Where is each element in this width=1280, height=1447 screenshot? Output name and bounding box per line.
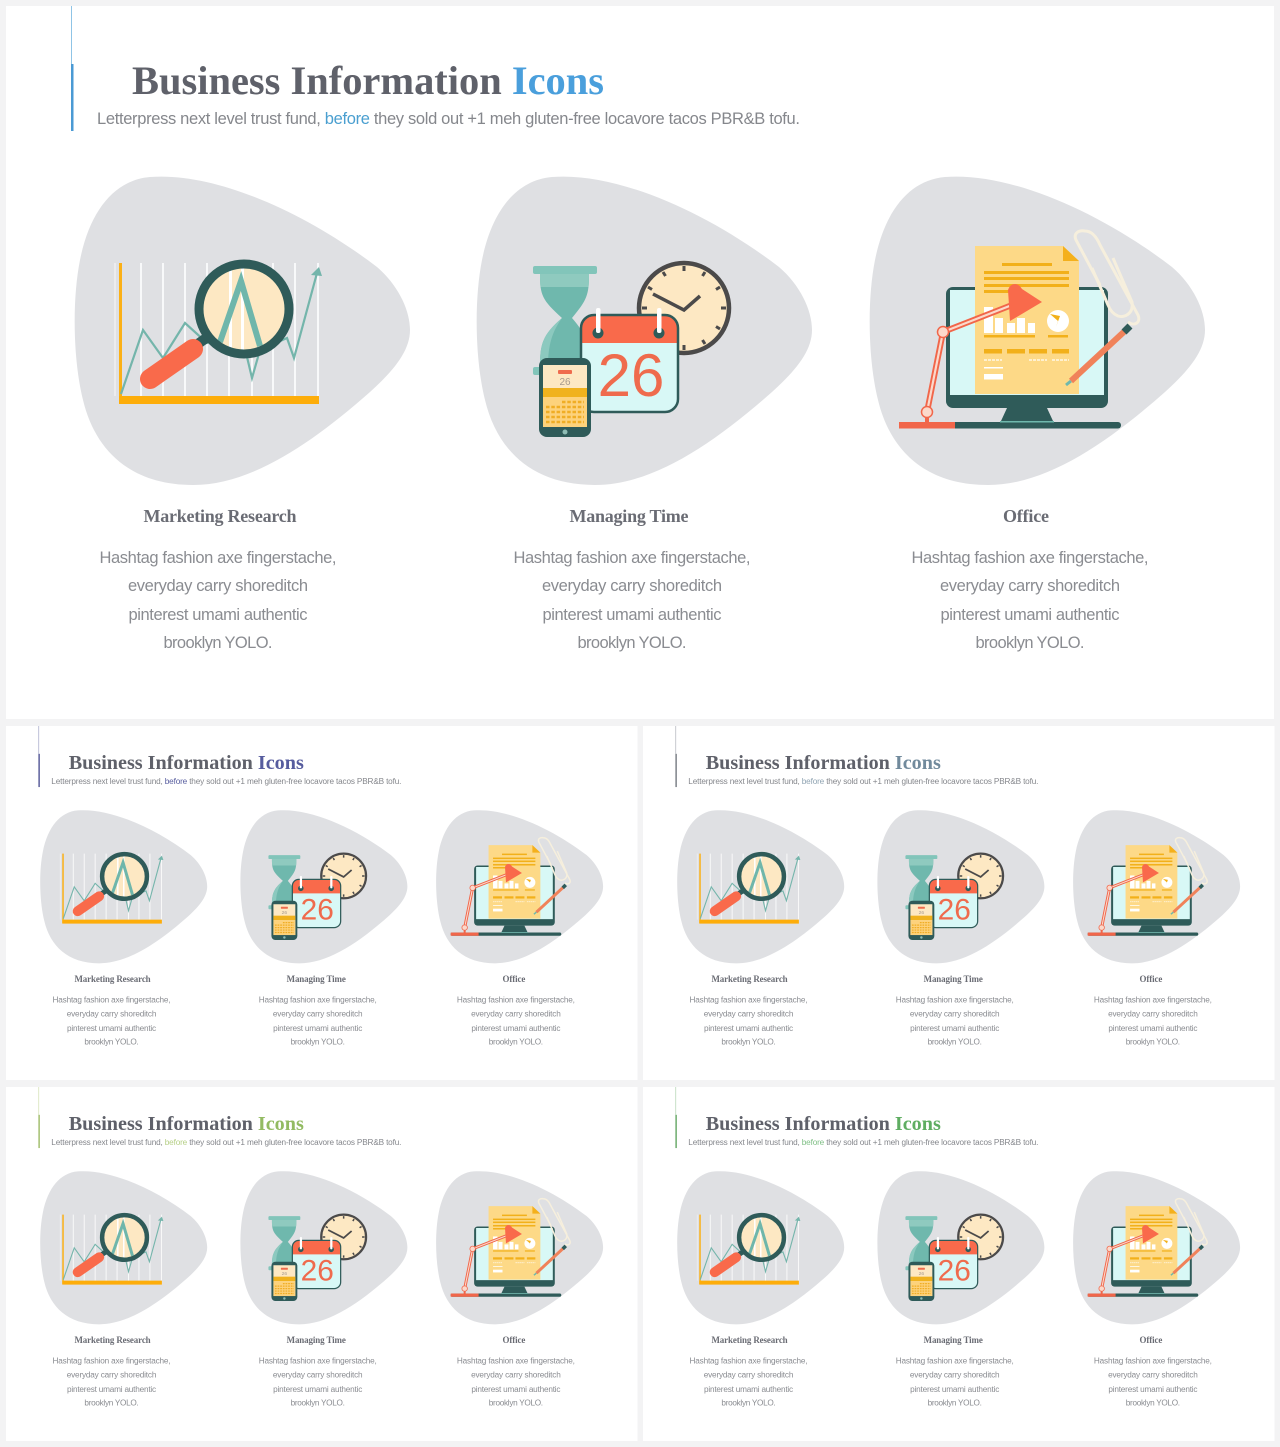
column: Managing Time: [877, 1171, 1044, 1408]
text block: Marketing Research: Hashtag fashion axe fingerstache,: [690, 996, 808, 1005]
icon: hourglass, clock, calendar and phone: [877, 1171, 1044, 1324]
slide background: [643, 726, 1274, 1080]
icon: hourglass, clock, calendar and phone: 26: [301, 894, 334, 927]
heading: Managing Time: Managing Time: [924, 1335, 983, 1345]
title: Business Information Icons: [706, 1113, 941, 1135]
text block: Marketing Research: Hashtag fashion axe fingerstache,: [100, 549, 336, 567]
column: Office: [436, 1171, 603, 1408]
text block: Marketing Research: brooklyn YOLO.: [721, 1399, 776, 1408]
text block: Managing Time: Hashtag fashion axe fingerstache,: [896, 1357, 1014, 1366]
icon: hourglass, clock, calendar and phone: 26: [938, 1255, 971, 1288]
icon: monitor, document and lamp: [1073, 810, 1240, 963]
heading: Managing Time: Managing Time: [287, 1335, 346, 1345]
accent line: [675, 1087, 677, 1148]
text block: Managing Time: Hashtag fashion axe fingerstache,: [259, 996, 377, 1005]
text block: Managing Time: brooklyn YOLO.: [578, 634, 686, 652]
text block: Marketing Research: brooklyn YOLO.: [84, 1038, 139, 1047]
panel: light green slide: [6, 1087, 637, 1441]
text block: Marketing Research: brooklyn YOLO.: [84, 1399, 139, 1408]
text block: Managing Time: everyday carry shoreditch: [273, 1009, 363, 1018]
heading: Office: Office: [503, 974, 525, 984]
text block: Office: [912, 549, 1148, 652]
text block: Office: brooklyn YOLO.: [489, 1399, 543, 1408]
text block: Office: Hashtag fashion axe fingerstache,: [1094, 1357, 1212, 1366]
text block: Marketing Research: [690, 1357, 808, 1408]
icon: magnifier over chart: [677, 1171, 844, 1324]
text block: Office: pinterest umami authentic: [471, 1024, 561, 1033]
text block: Marketing Research: pinterest umami authentic: [67, 1024, 156, 1033]
icon: magnifier over chart: [75, 177, 410, 485]
column: Office: [1073, 1171, 1240, 1408]
heading: Managing Time: Managing Time: [287, 974, 346, 984]
column: Office: [870, 177, 1205, 652]
text block: Office: [457, 1357, 575, 1408]
panel: main blue slide: [6, 6, 1274, 719]
text block: Marketing Research: everyday carry shoreditch: [128, 577, 308, 595]
icon: hourglass, clock, calendar and phone: 26: [282, 910, 287, 916]
heading: Marketing Research: Marketing Research: [74, 1335, 151, 1345]
text block: Managing Time: pinterest umami authentic: [273, 1024, 362, 1033]
text block: Marketing Research: Hashtag fashion axe fingerstache,: [53, 996, 171, 1005]
text block: Office: [457, 996, 575, 1047]
panel: slate slide: [643, 726, 1274, 1080]
text block: Managing Time: [896, 996, 1014, 1047]
slide background: [6, 1087, 637, 1441]
text block: Office: brooklyn YOLO.: [1126, 1399, 1180, 1408]
icon: hourglass, clock, calendar and phone: 26: [919, 910, 924, 916]
text block: Office: pinterest umami authentic: [471, 1385, 561, 1394]
column: Marketing Research: [40, 1171, 207, 1408]
text block: Marketing Research: pinterest umami authentic: [128, 606, 308, 624]
column: Managing Time: [877, 810, 1044, 1047]
text block: Managing Time: pinterest umami authentic: [910, 1024, 999, 1033]
text block: Office: everyday carry shoreditch: [471, 1370, 561, 1379]
text block: Office: pinterest umami authentic: [1108, 1385, 1198, 1394]
icon: magnifier over chart: [677, 810, 844, 963]
column: Marketing Research: [677, 1171, 844, 1408]
text block: Managing Time: everyday carry shoreditch: [910, 1009, 1000, 1018]
accent line: [38, 1087, 40, 1148]
accent line: [38, 726, 40, 787]
heading: Managing Time: Managing Time: [570, 506, 688, 526]
text block: Office: Hashtag fashion axe fingerstache,: [457, 1357, 575, 1366]
icon: magnifier over chart: [40, 810, 207, 963]
text block: Managing Time: pinterest umami authentic: [910, 1385, 999, 1394]
text block: Marketing Research: pinterest umami authentic: [67, 1385, 156, 1394]
text block: Managing Time: everyday carry shoreditch: [273, 1370, 363, 1379]
text block: Managing Time: [259, 996, 377, 1047]
text block: Office: brooklyn YOLO.: [976, 634, 1084, 652]
icon: hourglass, clock, calendar and phone: 26: [919, 1271, 924, 1277]
text block: Managing Time: [896, 1357, 1014, 1408]
column: Managing Time: [240, 1171, 407, 1408]
title: Business Information Icons: [706, 752, 941, 774]
column: Marketing Research: [40, 810, 207, 1047]
column: Office: [1073, 810, 1240, 1047]
text block: Office: Hashtag fashion axe fingerstache,: [1094, 996, 1212, 1005]
text block: Marketing Research: pinterest umami authentic: [704, 1385, 793, 1394]
text block: Marketing Research: everyday carry shoreditch: [67, 1009, 157, 1018]
icon: monitor, document and lamp: [436, 810, 603, 963]
text block: Marketing Research: everyday carry shoreditch: [704, 1009, 794, 1018]
heading: Marketing Research: Marketing Research: [711, 974, 788, 984]
text block: Marketing Research: brooklyn YOLO.: [721, 1038, 776, 1047]
heading: Office: Office: [1003, 506, 1049, 526]
text block: Managing Time: Hashtag fashion axe fingerstache,: [896, 996, 1014, 1005]
icon: hourglass, clock, calendar and phone: 26: [598, 342, 664, 409]
text block: Office: [1094, 1357, 1212, 1408]
icon: monitor, document and lamp: [1073, 1171, 1240, 1324]
text block: Office: everyday carry shoreditch: [1108, 1009, 1198, 1018]
icon: monitor, document and lamp: [870, 177, 1205, 485]
text block: Managing Time: brooklyn YOLO.: [291, 1038, 345, 1047]
text block: Managing Time: pinterest umami authentic: [542, 606, 722, 624]
column: Marketing Research: [677, 810, 844, 1047]
text block: Managing Time: brooklyn YOLO.: [928, 1399, 982, 1408]
text block: Office: brooklyn YOLO.: [1126, 1038, 1180, 1047]
text block: Office: [1094, 996, 1212, 1047]
heading: Office: Office: [1140, 974, 1162, 984]
heading: Marketing Research: Marketing Research: [711, 1335, 788, 1345]
subtitle: Letterpress next level trust fund, before they sold out +1 meh gluten-free locavore tacos PBR&B tofu.: [97, 110, 800, 128]
text block: Marketing Research: Hashtag fashion axe fingerstache,: [690, 1357, 808, 1366]
subtitle: Letterpress next level trust fund, before they sold out +1 meh gluten-free locavore tacos PBR&B tofu.: [688, 1138, 1038, 1147]
text block: Managing Time: [259, 1357, 377, 1408]
text block: Office: Hashtag fashion axe fingerstache,: [457, 996, 575, 1005]
text block: Managing Time: everyday carry shoreditch: [542, 577, 722, 595]
text block: Managing Time: pinterest umami authentic: [273, 1385, 362, 1394]
text block: Managing Time: brooklyn YOLO.: [928, 1038, 982, 1047]
column: Office: [436, 810, 603, 1047]
column: Marketing Research: [75, 177, 410, 652]
subtitle: Letterpress next level trust fund, before they sold out +1 meh gluten-free locavore tacos PBR&B tofu.: [51, 777, 401, 786]
text block: Managing Time: brooklyn YOLO.: [291, 1399, 345, 1408]
panel: green slide: [643, 1087, 1274, 1441]
slide background: [6, 6, 1274, 719]
column: Managing Time: [477, 177, 812, 652]
accent line: [675, 726, 677, 787]
icon: hourglass, clock, calendar and phone: 26: [282, 1271, 287, 1277]
subtitle: Letterpress next level trust fund, before they sold out +1 meh gluten-free locavore tacos PBR&B tofu.: [51, 1138, 401, 1147]
panel: indigo slide: [6, 726, 637, 1080]
title: Business Information Icons: [69, 752, 304, 774]
text block: Marketing Research: everyday carry shoreditch: [704, 1370, 794, 1379]
icon: hourglass, clock, calendar and phone: 26: [938, 894, 971, 927]
icon: hourglass, clock, calendar and phone: [240, 1171, 407, 1324]
text block: Office: everyday carry shoreditch: [471, 1009, 561, 1018]
icon: hourglass, clock, calendar and phone: [477, 177, 812, 485]
text block: Office: Hashtag fashion axe fingerstache,: [912, 549, 1148, 567]
text block: Office: brooklyn YOLO.: [489, 1038, 543, 1047]
text block: Marketing Research: [53, 1357, 171, 1408]
heading: Marketing Research: Marketing Research: [144, 506, 296, 526]
title: Business Information Icons: [69, 1113, 304, 1135]
text block: Managing Time: [514, 549, 750, 652]
text block: Marketing Research: everyday carry shoreditch: [67, 1370, 157, 1379]
heading: Office: Office: [1140, 1335, 1162, 1345]
text block: Office: everyday carry shoreditch: [940, 577, 1120, 595]
slide background: [6, 726, 637, 1080]
text block: Office: everyday carry shoreditch: [1108, 1370, 1198, 1379]
text block: Office: pinterest umami authentic: [940, 606, 1120, 624]
text block: Marketing Research: [690, 996, 808, 1047]
heading: Office: Office: [503, 1335, 525, 1345]
text block: Managing Time: Hashtag fashion axe fingerstache,: [259, 1357, 377, 1366]
text block: Managing Time: everyday carry shoreditch: [910, 1370, 1000, 1379]
text block: Marketing Research: [53, 996, 171, 1047]
column: Managing Time: [240, 810, 407, 1047]
text block: Marketing Research: Hashtag fashion axe fingerstache,: [53, 1357, 171, 1366]
subtitle: Letterpress next level trust fund, before they sold out +1 meh gluten-free locavore tacos PBR&B tofu.: [688, 777, 1038, 786]
text block: Marketing Research: brooklyn YOLO.: [164, 634, 272, 652]
title: Business Information Icons: [132, 58, 604, 103]
icon: hourglass, clock, calendar and phone: 26: [559, 377, 571, 388]
heading: Managing Time: Managing Time: [924, 974, 983, 984]
text block: Marketing Research: [100, 549, 336, 652]
icon: magnifier over chart: [40, 1171, 207, 1324]
text block: Managing Time: Hashtag fashion axe fingerstache,: [514, 549, 750, 567]
icon: hourglass, clock, calendar and phone: [877, 810, 1044, 963]
heading: Marketing Research: Marketing Research: [74, 974, 151, 984]
text block: Marketing Research: pinterest umami authentic: [704, 1024, 793, 1033]
accent line: [71, 6, 74, 131]
icon: hourglass, clock, calendar and phone: 26: [301, 1255, 334, 1288]
icon: monitor, document and lamp: [436, 1171, 603, 1324]
slide background: [643, 1087, 1274, 1441]
text block: Office: pinterest umami authentic: [1108, 1024, 1198, 1033]
icon: hourglass, clock, calendar and phone: [240, 810, 407, 963]
